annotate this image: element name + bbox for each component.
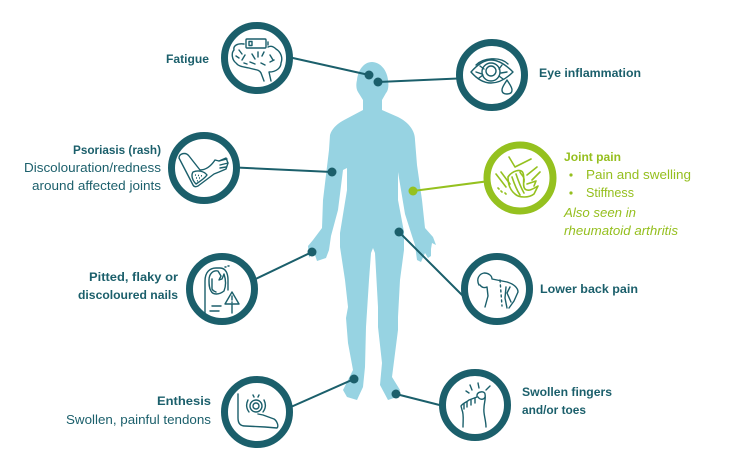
connector: nails bbox=[222, 248, 316, 295]
icon: swollen toes bbox=[442, 372, 508, 438]
label: nails bbox=[78, 270, 178, 302]
label: enthesis: Swollen, painful tendons bbox=[66, 412, 212, 427]
label: psoriasis: Psoriasis (rash) bbox=[73, 143, 161, 157]
icon: joint pain hands bbox=[487, 145, 553, 211]
icon: inflamed eye with tear bbox=[460, 42, 524, 108]
label: eye inflammation: Eye inflammation bbox=[539, 66, 641, 80]
connector: enthesis bbox=[257, 374, 358, 422]
label: fatigue: Fatigue bbox=[166, 52, 209, 66]
icon: fatigue brain with battery bbox=[224, 26, 290, 90]
label: joint pain: Also seen in bbox=[563, 205, 636, 220]
label: swollen toes bbox=[522, 385, 612, 417]
connector: psoriasis bbox=[204, 166, 336, 176]
label: lower back pain: Lower back pain bbox=[540, 282, 638, 296]
connector: joint pain bbox=[408, 177, 520, 196]
connector: eye inflammation bbox=[374, 77, 492, 86]
label: joint pain: Joint pain bbox=[564, 150, 621, 164]
label: nails: Pitted, flaky or bbox=[89, 270, 178, 284]
label: nails: discoloured nails bbox=[78, 288, 178, 302]
connector: swollen toes bbox=[392, 390, 475, 414]
icon: nail with warning bbox=[190, 256, 254, 322]
human body silhouette bbox=[308, 62, 436, 400]
label: joint pain: rheumatoid arthritis bbox=[564, 223, 678, 238]
label: psoriasis: Discolouration/redness bbox=[24, 160, 162, 175]
label: joint pain: Pain and swelling bbox=[586, 167, 691, 182]
label: joint pain bbox=[563, 150, 691, 238]
label: enthesis bbox=[66, 394, 212, 427]
connector: lower back pain bbox=[394, 228, 475, 308]
label: swollen toes: and/or toes bbox=[522, 403, 586, 417]
label: swollen toes: Swollen fingers bbox=[522, 385, 612, 399]
label: psoriasis bbox=[24, 143, 162, 193]
label: psoriasis: around affected joints bbox=[32, 178, 162, 193]
icon: bent back with spine bbox=[464, 256, 530, 322]
label: joint pain: Stiffness bbox=[586, 185, 634, 200]
connector: fatigue bbox=[257, 50, 374, 80]
label: enthesis: Enthesis bbox=[157, 394, 211, 408]
icon: foot with tendon target bbox=[224, 380, 290, 444]
icon: elbow with rash bbox=[172, 136, 236, 200]
